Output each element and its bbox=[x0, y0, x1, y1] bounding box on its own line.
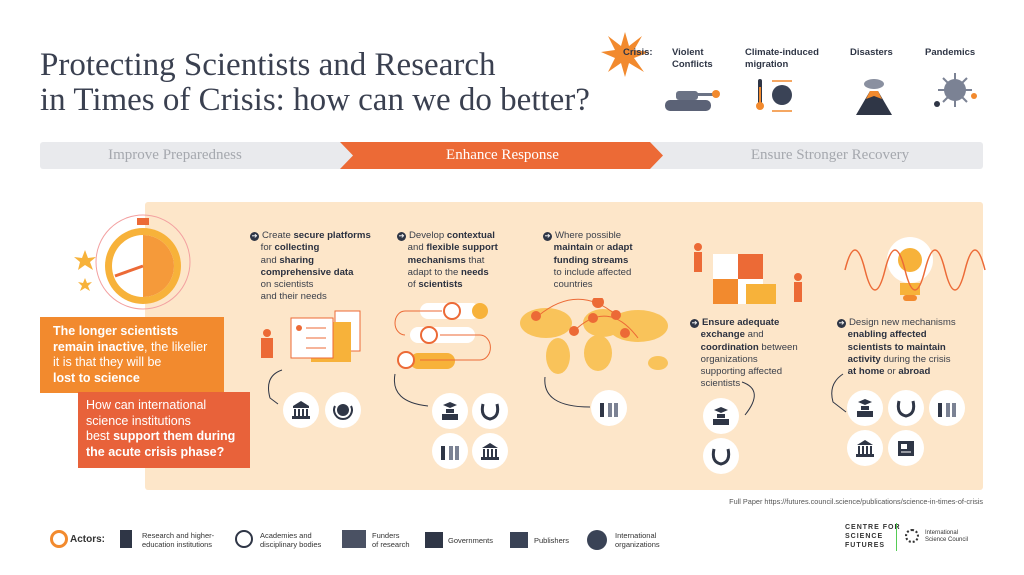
crisis legend bbox=[601, 32, 977, 115]
actors legend: Academies and bbox=[260, 531, 312, 540]
callout: question: the acute crisis phase? bbox=[86, 445, 224, 459]
arrow: col3 bbox=[544, 377, 590, 408]
logos: International bbox=[925, 530, 958, 536]
column 3 text: Where possible bbox=[555, 230, 621, 241]
source note: Full Paper https://futures.council.science/publications/science-in-times-of-crisis bbox=[729, 497, 983, 506]
column 2 text: Develop contextual bbox=[409, 230, 495, 241]
column 1 text: ➔ bbox=[252, 233, 257, 240]
icon: tank bbox=[665, 90, 720, 111]
callout: lost to science: lost to science bbox=[53, 371, 140, 385]
column 2 text: adapt to the needs bbox=[408, 267, 489, 278]
arrow: col4 bbox=[742, 382, 755, 416]
logos: CENTRE FOR bbox=[845, 524, 900, 531]
column 1 text bbox=[250, 230, 371, 302]
column 3 text: ➔ bbox=[545, 233, 550, 240]
icon: virus bbox=[934, 73, 977, 107]
crisis legend: Conflicts bbox=[672, 58, 713, 70]
column 2 text: ➔ bbox=[399, 233, 404, 240]
actors legend: Actors: bbox=[70, 534, 105, 545]
callout: lost to science bbox=[40, 317, 224, 393]
logos: FUTURES bbox=[845, 542, 885, 549]
column 4 actors bbox=[703, 398, 739, 474]
column 3 text: maintain or adapt bbox=[554, 242, 633, 253]
column 4 text: coordination between bbox=[701, 342, 798, 353]
actors legend: Publishers bbox=[534, 536, 569, 545]
crisis legend: migration bbox=[745, 58, 788, 70]
icon: volcano bbox=[856, 79, 892, 115]
icon: stopwatch bbox=[74, 214, 190, 310]
column 1 text: for collecting bbox=[261, 242, 319, 253]
callout: question bbox=[78, 392, 250, 468]
column 3 text: to include affected bbox=[554, 267, 631, 278]
column 1 actors bbox=[283, 392, 361, 428]
progress bar: Improve Preparedness bbox=[108, 147, 242, 163]
actors legend: Research and higher- bbox=[142, 531, 214, 540]
column 3 text: countries bbox=[554, 279, 593, 290]
callout: question: How can international bbox=[86, 398, 206, 412]
crisis legend: Crisis: bbox=[623, 47, 653, 58]
icon: starburst bbox=[601, 32, 649, 77]
column 1 text: comprehensive data bbox=[261, 267, 353, 278]
column 3 text: funding streams bbox=[554, 255, 628, 266]
title bbox=[40, 47, 590, 118]
callout: lost to science: it is that they will be bbox=[53, 355, 161, 369]
column 4 text: supporting affected bbox=[701, 366, 782, 377]
column 1 text: and sharing bbox=[261, 255, 314, 266]
progress bar: Enhance Response bbox=[446, 147, 559, 163]
column 5 text: Design new mechanisms bbox=[849, 317, 956, 328]
icon: gears bbox=[394, 302, 491, 369]
crisis legend: Pandemics bbox=[925, 47, 975, 58]
icon: thermometer globe bbox=[756, 79, 792, 112]
column 2 actors bbox=[432, 393, 508, 469]
column 1 text: on scientists bbox=[261, 279, 313, 290]
column 5 text: ➔ bbox=[839, 320, 844, 327]
column 3 actors bbox=[591, 390, 627, 426]
callout: question: science institutions bbox=[86, 414, 191, 428]
column 2 text: mechanisms that bbox=[408, 255, 484, 266]
column 2 text bbox=[397, 230, 498, 290]
column 5 text: activity during the crisis bbox=[848, 354, 951, 365]
actors legend: organizations bbox=[615, 540, 660, 549]
arrow: col5 bbox=[831, 374, 846, 412]
actors legend: of research bbox=[372, 540, 410, 549]
progress bar: Ensure Stronger Recovery bbox=[751, 147, 909, 163]
title: in Times of Crisis: how can we do better? bbox=[40, 82, 590, 118]
column 5 actors bbox=[847, 390, 965, 466]
column 4 text: exchange and bbox=[701, 329, 764, 340]
column 3 text bbox=[543, 230, 633, 290]
progress bar bbox=[40, 142, 983, 169]
column 5 text: scientists to maintain bbox=[848, 342, 946, 353]
logos: Science Council bbox=[925, 537, 968, 543]
icon: world map bbox=[520, 298, 668, 374]
column 1 text: Create secure platforms bbox=[262, 230, 371, 241]
column 4 text: Ensure adequate bbox=[702, 317, 779, 328]
arrow: col1 bbox=[268, 370, 282, 404]
callout: question: best support them during bbox=[86, 429, 235, 443]
column 1 text: and their needs bbox=[261, 291, 327, 302]
crisis legend: Disasters bbox=[850, 47, 893, 58]
actors legend bbox=[50, 530, 660, 550]
logos: SCIENCE bbox=[845, 533, 883, 540]
icon: data platform bbox=[261, 310, 360, 362]
column 5 text: at home or abroad bbox=[848, 366, 930, 377]
column 4 text: organizations bbox=[701, 354, 758, 365]
column 5 text: enabling affected bbox=[848, 329, 927, 340]
column 4 text bbox=[690, 317, 798, 389]
icon: puzzle bbox=[694, 243, 802, 304]
crisis legend: Violent bbox=[672, 47, 704, 58]
actors legend: education institutions bbox=[142, 540, 212, 549]
logos bbox=[845, 523, 968, 551]
callout: lost to science: remain inactive, the likelier bbox=[53, 340, 207, 354]
actors legend: disciplinary bodies bbox=[260, 540, 321, 549]
actors legend: Governments bbox=[448, 536, 493, 545]
column 4 text: ➔ bbox=[692, 320, 697, 327]
icon: lightbulb wave bbox=[844, 237, 986, 301]
arrow: col2 bbox=[394, 374, 428, 406]
actors legend: Funders bbox=[372, 531, 400, 540]
panel: background bbox=[145, 202, 983, 490]
column 2 text: and flexible support bbox=[408, 242, 498, 253]
column 5 text bbox=[837, 317, 956, 377]
title: Protecting Scientists and Research bbox=[40, 47, 495, 83]
callout: lost to science: The longer scientists bbox=[53, 324, 178, 338]
actors legend: International bbox=[615, 531, 656, 540]
crisis legend: Climate-induced bbox=[745, 47, 819, 58]
column 2 text: of scientists bbox=[408, 279, 463, 290]
column 4 text: scientists bbox=[701, 378, 740, 389]
